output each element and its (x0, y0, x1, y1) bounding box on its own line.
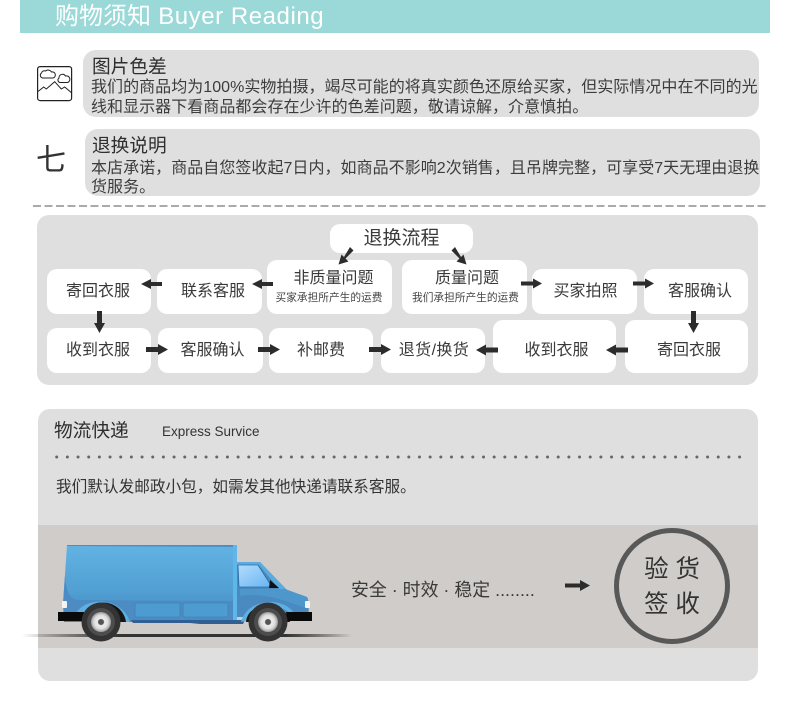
step: return or exchange: 退货/换货 (399, 342, 469, 359)
step: return clothes (47, 269, 151, 314)
step: quality issue: 我们承担所产生的运费 (412, 292, 519, 304)
heading: colour difference: 图片色差 (92, 56, 167, 77)
panel: logistics (38, 409, 758, 681)
step: non-quality issue: 非质量问题 (293, 270, 374, 287)
heading: express service: Express Survice (162, 424, 260, 439)
text: return policy body: 货服务。 (91, 179, 155, 196)
step: pay postage (269, 328, 373, 373)
step: clothes received (47, 328, 151, 373)
step: service confirms second row: 客服确认 (180, 342, 244, 359)
text: colour difference body: 线和显示器下看商品都会存在少许的色差问题，敬请谅解，介意慎拍。 (91, 98, 588, 116)
text: default shipping note: 我们默认发邮政小包，如需发其他快递请联系客服。 (56, 479, 416, 496)
panel: return process (37, 215, 758, 385)
stamp: inspect and sign: 签 收 (644, 591, 700, 618)
arrow to inspection stamp (565, 580, 590, 591)
heading: logistics: 物流快递 (54, 420, 129, 441)
text: colour difference body (91, 78, 758, 116)
icon: seven day return: 七 (36, 144, 66, 177)
text: colour difference body: 我们的商品均为100%实物拍摄，竭尽可能的将真实颜色还原给买家，但实际情况中在不同的光 (91, 79, 758, 96)
step: non-quality issue (267, 260, 392, 314)
panel: return policy (85, 129, 760, 196)
step: buyer photo (532, 269, 637, 314)
step: quality issue (402, 260, 527, 314)
step: contact service: 联系客服 (181, 283, 245, 300)
step: buyer photo: 买家拍照 (553, 283, 618, 300)
header banner: 购物须知 Buyer Reading (55, 3, 324, 30)
delivery band (38, 525, 758, 648)
step: contact service (157, 269, 262, 314)
step: return clothes: 寄回衣服 (66, 283, 130, 300)
header banner (20, 0, 770, 33)
step: service confirms: 客服确认 (668, 283, 732, 300)
step: service confirms (644, 269, 748, 314)
text: return policy body: 本店承诺，商品自您签收起7日内，如商品不影响2次销售，且吊牌完整，可享受7天无理由退换 (91, 160, 759, 176)
stamp: inspect and sign: 验 货 (644, 556, 700, 583)
step: return or exchange (381, 328, 485, 373)
stamp: inspect and sign (614, 528, 730, 644)
step: quality issue: 质量问题 (435, 270, 499, 287)
flow title (330, 224, 473, 253)
text: return policy body (91, 159, 759, 196)
step: service confirms second row (158, 328, 263, 373)
step: pay postage: 补邮费 (297, 342, 345, 359)
heading: return policy: 退换说明 (92, 135, 167, 156)
flow title: 退换流程 (363, 228, 440, 249)
step: non-quality issue: 买家承担所产生的运费 (276, 292, 382, 304)
step: return clothes right: 寄回衣服 (657, 342, 721, 359)
text: safe timely stable: 安全 · 时效 · 稳定 ........ (351, 580, 535, 600)
step: clothes received right (493, 320, 616, 373)
step: clothes received right: 收到衣服 (524, 342, 588, 359)
icon: picture landscape (37, 66, 72, 102)
step: clothes received: 收到衣服 (66, 342, 130, 359)
step: return clothes right (625, 320, 748, 373)
panel: colour difference (83, 50, 759, 117)
